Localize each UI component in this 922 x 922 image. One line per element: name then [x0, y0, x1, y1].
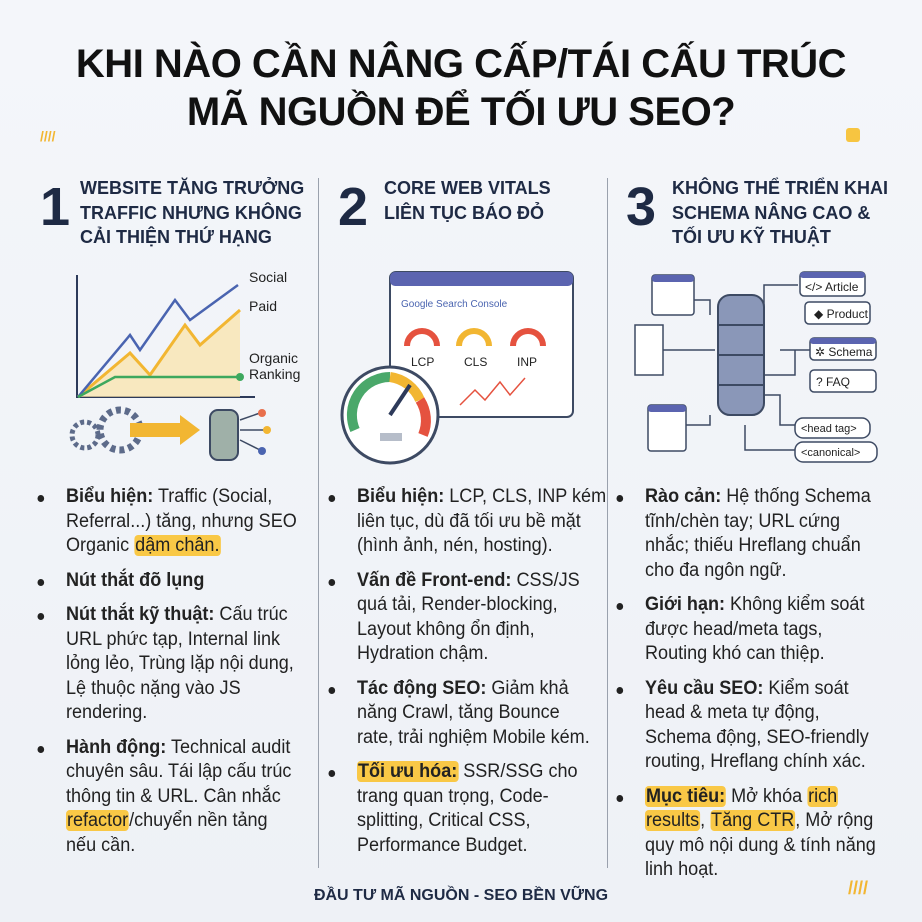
- text: panel 2: splitting, Critical CSS,: [357, 810, 531, 831]
- text: panel 3: Rào cản: Hệ thống Schema: [645, 486, 871, 507]
- text: panel 1: nếu cần.: [66, 834, 135, 856]
- illustration: core web vitals: Google Search Console: [401, 299, 508, 310]
- text: panel 2: Tác động SEO: Giảm khả: [357, 678, 569, 698]
- illustration: core web vitals: LCP: [411, 355, 434, 369]
- text: panel 1: URL phức tạp, Internal link: [66, 628, 280, 650]
- text: panel 3: quy mô nội dung & tính năng: [645, 834, 876, 856]
- chart: traffic growth: Social: [249, 269, 287, 285]
- illustration: schema database: ? FAQ: [816, 375, 850, 389]
- panel 2 header: CORE WEB VITALS: [384, 178, 551, 198]
- text: panel 3: tĩnh/chèn tay; URL cứng: [645, 510, 840, 532]
- text: panel 3: nhắc; thiếu Hreflang chuẩn: [645, 535, 861, 556]
- illustration: schema database: ✲ Schema: [815, 345, 873, 359]
- chart: traffic growth: Ranking: [249, 366, 300, 382]
- text: panel 2: [328, 486, 606, 856]
- text: panel 2: năng Crawl, tăng Bounce: [357, 702, 560, 723]
- illustration: schema database: </> Article: [805, 280, 859, 294]
- text: panel 2: trang quan trọng, Code-: [357, 786, 549, 806]
- illustration: core web vitals: [340, 271, 574, 464]
- text: panel 1: Lệ thuộc nặng vào JS: [66, 678, 241, 698]
- text: panel 1: Organic dậm chân.: [66, 535, 219, 556]
- panel 3 header: SCHEMA NÂNG CAO &: [672, 202, 870, 222]
- text: panel 3: cho đa ngôn ngữ.: [645, 560, 787, 580]
- text: panel 2: Tối ưu hóa: SSR/SSG cho: [358, 761, 578, 782]
- panel 1 header: WEBSITE TĂNG TRƯỞNG: [80, 178, 304, 198]
- text: panel 1: [38, 486, 297, 856]
- panel 1 header: 1: [40, 177, 70, 237]
- text: panel 3: Mục tiêu: Mở khóa rich: [646, 786, 837, 806]
- panel 3 header: TỐI ƯU KỸ THUẬT: [672, 227, 831, 247]
- text: panel 2: (hình ảnh, nén, hosting).: [357, 535, 553, 556]
- text: panel 2: quá tải, Render-blocking,: [357, 594, 558, 615]
- illustration: core web vitals: CLS: [464, 355, 487, 369]
- text: panel 3: Routing khó can thiệp.: [645, 643, 825, 664]
- text: panel 1: Biểu hiện: Traffic (Social,: [66, 486, 272, 507]
- panel 3 header: 3: [626, 177, 656, 237]
- text: panel 3: linh hoạt.: [645, 859, 718, 880]
- illustration: schema database: [634, 271, 878, 463]
- text: panel 2: Layout không ổn định,: [357, 618, 535, 640]
- panel 3 header: KHÔNG THỂ TRIỂN KHAI: [672, 178, 888, 198]
- text: panel 3: Schema động, SEO-friendly: [645, 726, 869, 748]
- title: KHI NÀO CẦN NÂNG CẤP/TÁI CẤU TRÚC: [76, 42, 846, 86]
- text: panel 1: lỏng lẻo, Trùng lặp nội dung,: [66, 653, 294, 674]
- text: panel 3: routing, Hreflang chính xác.: [645, 751, 866, 772]
- text: panel 2: Vấn đề Front-end: CSS/JS: [357, 570, 580, 590]
- panel 3 header: [626, 177, 888, 247]
- panel 1 header: TRAFFIC NHƯNG KHÔNG: [80, 202, 302, 222]
- illustration: core web vitals: INP: [517, 355, 537, 369]
- panel 1 header: CẢI THIỆN THỨ HẠNG: [80, 227, 272, 247]
- text: panel 1: Nút thắt đõ lụng: [66, 570, 204, 590]
- panel 2 header: [338, 177, 551, 237]
- text: panel 3: được head/meta tags,: [645, 618, 822, 640]
- text: panel 1: rendering.: [66, 702, 147, 723]
- text: panel 3: results, Tăng CTR, Mở rộng: [646, 810, 873, 831]
- illustration: schema database: <canonical>: [801, 447, 860, 459]
- panel 2 header: 2: [338, 177, 368, 237]
- text: panel 1: refactor/chuyển nền tảng: [67, 810, 268, 831]
- decoration: square: [846, 128, 860, 142]
- footer: ĐẦU TƯ MÃ NGUỒN - SEO BỀN VỮNG: [314, 887, 608, 904]
- text: panel 2: Biểu hiện: LCP, CLS, INP kém: [357, 486, 606, 507]
- text: panel 2: Performance Budget.: [357, 834, 528, 856]
- decoration: stripes bottom: ////: [848, 878, 868, 898]
- panel 1 header: [40, 177, 304, 247]
- text: panel 3: Yêu cầu SEO: Kiểm soát: [645, 678, 849, 698]
- chart: traffic growth: Paid: [249, 298, 277, 314]
- text: panel 1: thông tin & URL. Cân nhắc: [66, 786, 281, 806]
- text: panel 1: Referral...) tăng, nhưng SEO: [66, 510, 297, 532]
- text: panel 2: rate, trải nghiệm Mobile kém.: [357, 726, 590, 748]
- decoration: stripes: ////: [40, 128, 56, 144]
- chart: traffic growth: [70, 269, 300, 461]
- text: panel 2: Hydration chậm.: [357, 643, 488, 664]
- title: [76, 41, 846, 134]
- text: panel 3: head & meta tự động,: [645, 702, 820, 723]
- title: MÃ NGUỒN ĐỂ TỐI ƯU SEO?: [187, 90, 735, 134]
- text: panel 2: liên tục, dù đã tối ưu bề mặt: [357, 510, 581, 532]
- illustration: schema database: ◆ Product: [814, 307, 869, 321]
- text: panel 3: [616, 486, 876, 880]
- panel 2 header: LIÊN TỤC BÁO ĐỎ: [384, 202, 544, 222]
- text: panel 1: Nút thắt kỹ thuật: Cấu trúc: [66, 604, 288, 625]
- chart: traffic growth: Organic: [249, 350, 298, 366]
- text: panel 3: Giới hạn: Không kiểm soát: [645, 594, 864, 615]
- text: panel 1: Hành động: Technical audit: [66, 736, 290, 758]
- text: panel 1: chuyên sâu. Tái lập cấu trúc: [66, 761, 291, 782]
- illustration: schema database: <head tag>: [801, 423, 857, 435]
